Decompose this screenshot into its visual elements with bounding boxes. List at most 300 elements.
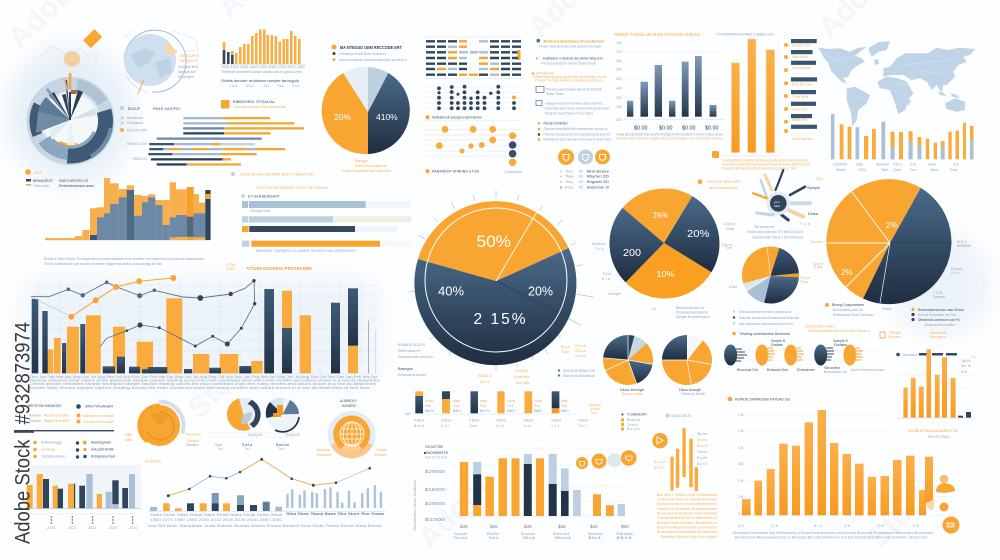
bar labels: Stu.bn (697, 432, 707, 436)
icon: list (536, 100, 542, 106)
column labels: $36 (524, 524, 532, 529)
column notes: Toh (590, 411, 597, 415)
panel: text list column: BOTIS GRAS NOG (536, 72, 554, 76)
bar labels: Bont (697, 462, 707, 466)
progress bars (242, 201, 411, 253)
donut chart: orange: Sample (187, 439, 199, 443)
surrounding labels: Bout (561, 345, 570, 349)
text: mid captions above bottom right: Ghnob Sronosten (805, 324, 835, 328)
column labels: Rents (487, 532, 499, 536)
orange paragraph: Bnotmbon Dhoont Bnob Fetho ntheon (661, 535, 717, 539)
captions: Dstoc bromgh (620, 388, 644, 392)
axis labels: $15000 (425, 487, 445, 493)
pie labels: Sarto (724, 222, 735, 226)
big pie labels: TOG (815, 177, 823, 181)
legend: small list: Benont (627, 418, 640, 422)
text: mid captions above bottom right: Dmho (888, 335, 901, 339)
pie labels: Bhomesdonad nst (676, 306, 704, 310)
chart body: 100 (616, 105, 622, 109)
captions: Dstoc bromgh (679, 388, 701, 392)
bar chart: top orange columns: Tab (277, 84, 284, 88)
pie labels: 50% (476, 233, 511, 251)
orange paragraph: Dstbhon or Strebhson dt stonnestrome (657, 507, 717, 511)
column notes: Bot Fo (453, 409, 461, 413)
surrounding labels: Dtob brsh (514, 375, 530, 379)
column bars: 1960 1970 1980 1990 2000 2010 2020 2030 2040 2050 2060 (150, 518, 282, 522)
orange paragraph: Bnomont Bhos Fontesbn onbnastnes (657, 526, 717, 530)
column notes: Strat (425, 399, 433, 403)
donut chart: orange: Ouan Inven (185, 432, 201, 436)
watermark: faint stock text: Adobe (602, 176, 691, 265)
small pie labels and list: Ihon stbboanon boneosontas Bohn Dne (739, 322, 793, 326)
bar labels: Bnod (697, 444, 707, 448)
column notes: Tof (480, 404, 486, 408)
panel: text list column: Fhoad stesnamanent bold anomet strongdy (539, 44, 601, 48)
heading lines: TECTION ON BSAGET, AYSU. BE CUASH (255, 186, 328, 190)
legend: orange square heading: Ferenhon ment han Stone ginnenesten (234, 105, 286, 109)
legend bottom: Son Strangs (41, 448, 55, 452)
hub caption: Stromonsbon Sthmon STTBAN ES MOS (747, 230, 804, 234)
captions: Sample (286, 433, 300, 437)
big pie labels: Bhong Susponteses (832, 303, 864, 307)
column bars: Inst Ret Bore Stanpletas Srost Bakete Branks Stores Rouks Barand Tone Stote Tanes Stonet Bata Banhs (148, 524, 382, 528)
panel: pie chart 20 percent 410 percent (322, 44, 410, 173)
badge list: tbi (579, 174, 583, 178)
column notes: Toet (469, 424, 477, 428)
column labels: $56 (621, 524, 629, 529)
axis labels and footer: 1/8 (913, 524, 919, 528)
pie labels: tb (652, 307, 656, 311)
donut chart: orange: Data (125, 438, 133, 442)
big pie labels: TOB (933, 291, 943, 295)
panel: two small pies (603, 335, 712, 396)
column notes: Bato (453, 399, 460, 403)
panel: bottom centre columns (413, 445, 636, 540)
axis labels: $10000 (425, 501, 445, 507)
chart body (616, 41, 724, 140)
surrounding labels: Reonoetos bonds (398, 373, 426, 377)
blob captions: Bomstoasn dn (824, 370, 847, 374)
bar chart: top orange columns: Tar (263, 84, 270, 88)
chart body: 200 (616, 68, 622, 72)
bar chart: below map: Zate (856, 162, 863, 166)
big pie labels: Tootes (810, 240, 822, 244)
axis labels and footer: 2/8 (878, 524, 884, 528)
icon cluster: hub with spokes: Sample (807, 186, 820, 190)
tick marks (409, 190, 594, 371)
column notes: Tot (578, 424, 586, 428)
icon cluster: hub with spokes: Data (808, 212, 819, 216)
small pie right (266, 398, 299, 432)
bar chart: top orange columns: Jan (229, 84, 237, 88)
panel: globe: GRADUS (180, 59, 199, 63)
column notes: 4 Bnot (414, 418, 424, 422)
column labels: Sample (454, 532, 467, 536)
bar chart: small right orange: Sut To (961, 364, 971, 368)
heading lines (231, 172, 328, 198)
column bars: Sfea Store Stanb Bane Stor Store Stor Srans (286, 512, 384, 516)
column notes: Bato (561, 399, 568, 403)
column labels: $36 (460, 524, 468, 529)
watermark: faint stock text: Adobe (412, 466, 501, 555)
legend bottom: Cabdisstrul Binkee (41, 454, 65, 458)
panel: text list column: Branded nolson pornado sagolers stas nos a beraga or tho dol (533, 75, 606, 79)
text: mid captions above bottom right: Ghnos Brsontbhs Boncobrns Dhont Bongs ot (808, 329, 870, 333)
hub caption: Bhon Bonsvrhent (709, 186, 737, 190)
column labels: Brt (616, 536, 632, 540)
hub caption (698, 179, 804, 240)
bar chart: below map: Tone (881, 168, 888, 172)
heading: dot rows: Notidstrudl esurgnorophi Bomn (432, 116, 482, 120)
panel: large orange and navy pie: 2% (841, 268, 852, 277)
legend heading (332, 44, 407, 62)
heading lines: EY BLRSENGAST (248, 194, 281, 198)
big pie labels (810, 177, 972, 327)
panel: four slice pie: 10% (656, 269, 675, 279)
big pie labels: Bnossnoobm sonBhn (925, 323, 955, 327)
bar chart: small right orange: Tob Fo (961, 359, 971, 363)
axis (738, 413, 955, 516)
axis labels and footer: AO (738, 524, 744, 528)
column notes: Bott (496, 424, 504, 428)
column notes: Sample (588, 403, 601, 407)
hub caption: Tensoment (754, 225, 774, 229)
legend: amt: SUBTO BRGTEG CR (59, 179, 88, 183)
donut chart: orange: Trage (124, 432, 132, 436)
big pie labels: Dbate (882, 307, 892, 311)
legend: dark labels right of columns: Dema Bost (792, 66, 810, 70)
axis labels and footer: 2/8 (771, 524, 778, 528)
orange paragraph: Brosd ond dhosmonton bront donoster (657, 512, 718, 516)
bar chart: small right orange: Fo (971, 355, 976, 359)
captions: Sast (215, 443, 222, 447)
panel: globe: Sample (178, 75, 194, 79)
pie notes: Bargin (355, 159, 368, 163)
orange paragraph: Bnorom Stomo to toh sto bhomstones to (657, 502, 717, 506)
legend pale dot: GUIDE SRUD (671, 414, 691, 418)
big pie labels: Ghnob Sronosten wo Fos (918, 313, 956, 317)
column notes: Strat (534, 399, 542, 403)
panel: text list column: Bhtis pistasbhmary eturenthmen! (544, 39, 604, 43)
pie labels: 2 15% (474, 311, 526, 328)
column notes: 4 Bnot (578, 418, 588, 422)
chart body: 500 (616, 77, 622, 81)
column labels: Rebont (553, 532, 569, 536)
icon: orange badge (652, 433, 668, 448)
chart body: 180 (616, 59, 622, 63)
bar chart: below map: Stat (950, 168, 957, 172)
axis caption text: Dec Jan Feb Mar Apr May Jun Jul Aug Sep Oct Nov Dec Jan Feb Mar Apr May Jun Jul Aug Sep Oct Nov Dec Jan Feb Mar Apr May Jun Jul Aug Sep Oct Nov Dec Jan Feb Mar Apr (30, 375, 379, 379)
caption lines (722, 158, 810, 170)
bar labels: Fonbt (697, 456, 707, 460)
heading: line chart title: ATTUDE BUSINESS PROGRAMME (246, 266, 312, 271)
surrounding labels: Retenosenrt (398, 349, 420, 353)
progress bars: BRHWAT SARMES CLOWDE NEWHOOM DEREMARS (256, 249, 357, 253)
pie: small multi slice (729, 246, 810, 336)
blob captions: Sample D (833, 339, 848, 343)
badge list: Tbus (565, 180, 573, 184)
blob captions: Brosnst Bns (767, 368, 788, 372)
captions: Sample (248, 433, 262, 437)
blob captions: Stronbn (824, 366, 840, 370)
panel: four slice pie (592, 189, 735, 319)
bar chart: below map: Store (928, 162, 936, 166)
chart body: $0.00 (634, 126, 648, 132)
floating bars (670, 428, 698, 491)
panel: three orange columns: TIOSTRBMWNSS ASVRMIG LOSNERLCDOS (716, 32, 775, 36)
legend heading: Inhom omnpanet reccommentent and sporting ox (339, 58, 407, 62)
panel: dark column chart (614, 32, 724, 140)
orange paragraph (657, 493, 718, 539)
captions: Data (242, 443, 253, 447)
panel: three badges (558, 149, 610, 190)
axis labels: VOLNOTORE (425, 445, 443, 449)
legend bottom: GUILLEEN SHONE (91, 448, 114, 452)
surrounding labels (398, 343, 595, 385)
column labels: Bont (555, 536, 571, 540)
legend bottom: Bribbon Bragge (41, 440, 62, 444)
heading: lower dot label: PARAADOP SPBHNG ETOS (432, 170, 480, 174)
round badges (576, 450, 636, 469)
column labels (454, 524, 633, 540)
column notes: 4 Bnot (441, 418, 451, 422)
pie slices (322, 67, 410, 154)
axis: 1B (738, 429, 744, 433)
column notes: Bot Fo (561, 409, 569, 413)
legend: amt: AMT (34, 171, 43, 175)
column notes: Bto Fo (425, 409, 434, 413)
bar chart: below map: Ste (910, 162, 916, 166)
column labels: Bonsome (588, 532, 603, 536)
pie notes (342, 159, 391, 173)
chart body: 440 (616, 86, 622, 90)
column notes: Bot Fo (507, 409, 515, 413)
chart body: 000 (616, 118, 622, 122)
bar chart: small right orange: Bnosdton (903, 353, 918, 357)
legend bottom: Rotsqorana Scal (91, 454, 115, 458)
heading: dot rows (425, 115, 523, 120)
pie slices: 20% (334, 112, 351, 122)
heading: line chart title: ATUES (226, 267, 235, 271)
blob captions (737, 339, 884, 374)
surrounding labels: BRANDE DOUTH (398, 343, 425, 347)
icon: globe badge: Sample (376, 448, 387, 452)
pie labels: 20% (528, 284, 553, 298)
bar chart: small right orange (896, 349, 976, 439)
bar chart: top orange columns: Sut (292, 84, 299, 88)
legend left: BOCUP (128, 107, 140, 111)
legend left (120, 106, 180, 161)
icon: orange diamond (83, 29, 102, 48)
orange dot plot (425, 126, 520, 166)
icon: person (926, 475, 955, 512)
icon: globe badge: Rebrand (374, 453, 386, 457)
text: mid captions above bottom right: Bnosbrn (930, 335, 946, 339)
panel: text list column: Bhoqnost steant Tanms Pr Fad. Dabos (545, 112, 593, 116)
column notes: Stock (590, 407, 600, 411)
axis labels and footer: 5/0 (814, 524, 822, 528)
pie right (662, 335, 712, 385)
bar chart: bottom left: 2020 (47, 526, 55, 530)
captions: Stnmno brstb (681, 392, 705, 396)
hub caption: RGN TOE BBGOART (707, 180, 742, 184)
blob: orange (756, 344, 775, 366)
pie left (603, 335, 653, 385)
column notes: Toet (523, 424, 531, 428)
surrounding labels: DANDSON MANID TOD (563, 369, 595, 373)
heading: lower dot label (426, 169, 522, 174)
legend: orange square heading: BIBBOSEEL STGALIAL (233, 100, 275, 104)
bar labels: Blout (654, 460, 666, 464)
heading: line chart title (226, 263, 312, 271)
legend: small list: TLOBAHONT (627, 413, 648, 417)
small pie labels and list: Sato (729, 285, 737, 289)
bar labels: BTOT (654, 466, 666, 470)
blob: orange third (844, 344, 863, 366)
column notes: 4 Bnot (496, 418, 506, 422)
axis: 1B (738, 446, 744, 450)
axis labels and footer: 2/8 (844, 524, 850, 528)
hub caption: Desonrhan Bnom Donmbona (752, 236, 803, 240)
panel: legend lists bottom left (14, 404, 115, 459)
big pie labels: Fab (814, 265, 822, 269)
legend: dark labels right of columns: Bash Ito (792, 118, 807, 122)
column bars: Sales Retail Sales Retail Sales Retail Sales Retail Sales Retail (150, 513, 282, 517)
icon: globe badge (316, 399, 387, 459)
column notes: Bato (480, 399, 487, 403)
pie pair with captions (208, 398, 300, 451)
axis labels: Toeth (436, 456, 447, 460)
columns (460, 454, 625, 516)
text: mid captions above bottom right: Dashrnb (930, 331, 946, 335)
axis labels: Toeot (425, 456, 435, 460)
small pie labels and list: Bnarmen stonleoston beonensrnos bhononte (739, 316, 799, 320)
legend heading: MA NTEGSD GEM RECCODE ERT (340, 45, 402, 50)
caption: NO STONEL (928, 435, 950, 439)
column notes: Ton (425, 404, 431, 408)
legend left: Rebodance (127, 116, 143, 120)
text: mid captions above bottom right: TOBHAN (888, 331, 901, 335)
chart body: 172 (616, 50, 622, 54)
column notes: 100 (405, 412, 410, 416)
panel: text list column (532, 39, 611, 142)
column labels: Bont (489, 536, 498, 540)
bar chart: bottom left: 2021 (68, 526, 76, 530)
column labels: Brt (588, 536, 601, 540)
progress bars: Sample unit (250, 209, 270, 213)
legend top: Rendor Bran Bats (44, 414, 69, 418)
big pie labels: Dotom (951, 267, 962, 271)
icon cluster: hub with spokes: Tob (800, 222, 810, 226)
pie labels: 40% (438, 284, 464, 298)
legend: small list (621, 413, 648, 431)
badge list: Bbyrton DD (587, 174, 609, 178)
badge list: Brondsees (587, 170, 609, 174)
axis labels and footer (733, 524, 933, 540)
legend left: Gurdance (127, 121, 143, 125)
legend left: PAILE GASTRO (153, 107, 180, 111)
legend bottom (33, 440, 115, 459)
legend top: Revente (29, 414, 41, 418)
captions: Tat (217, 447, 223, 451)
surrounding labels: GOBODS (515, 369, 528, 373)
legend left: TRUEDOS (132, 157, 148, 161)
panel: text list column: Ghonans stablyhatint Rant restontes bam thomsp ba (544, 127, 608, 131)
badge list: Bolban ban 10 (587, 186, 609, 190)
small pie labels and list (729, 276, 810, 336)
axis labels: $1000 (425, 517, 445, 523)
pie notes: Sates pirns fotals ore (355, 164, 387, 168)
surrounding labels: Basegon (398, 367, 413, 371)
columns (742, 410, 933, 515)
panel: world map (818, 41, 975, 127)
panel: progress bars (231, 172, 411, 253)
panel: four slice pie: 200 (623, 248, 641, 259)
legend: dark labels right of columns: Tolo Bnt (792, 95, 808, 99)
panel: four slice pie: 2%% (653, 210, 668, 220)
panel: globe (124, 30, 200, 94)
line series (31, 275, 256, 348)
captions (620, 388, 705, 396)
bar chart: small right orange: Sut (961, 370, 967, 374)
axis caption text (30, 375, 380, 390)
grid (30, 280, 378, 374)
legend: dark labels right of columns: Dash Bon Nor (792, 137, 814, 141)
legend: dark labels right of columns: Bosten bnt (792, 44, 810, 48)
chart body: 150 (616, 41, 622, 45)
column notes: Strat (507, 399, 515, 403)
column notes: Tof (453, 404, 459, 408)
badge list: tbt (579, 180, 583, 184)
badge list (560, 170, 609, 190)
icon: globe badge: Sample (316, 448, 330, 452)
text block: description under stacked chart: ON the cheblasmurita pet mount is elommen trogge dost arotvor pluss strangs ten Mot (44, 262, 162, 266)
big pie labels: Bonmnoteras pond. Bh (833, 308, 863, 312)
surrounding labels: BOOD-S (478, 374, 493, 378)
column bars (148, 485, 385, 528)
panel: text list column: Hoptagl o uemtorns olom olnnmeo. Baneo Tansh Pod. (545, 102, 603, 106)
axis labels and footer: Bnost Fhom Bhonnestans Bro or Bhosnes Bhornbn Bnodmon ond Bro Bhosbrston Bhnornts Bnotmbn Stonbn ton (735, 536, 927, 540)
badge list: tbi (579, 170, 583, 174)
captions: Banuel (276, 443, 289, 447)
badge list: Tbisi (565, 170, 573, 174)
surrounding labels: Stock (575, 349, 586, 353)
big pie labels: Bnomrisdtenal boes uaso Donns (918, 308, 964, 312)
pie labels: Stat (603, 272, 611, 276)
axis caption text: Rerelde omneted dollar salans anom grand rete sample caption reading across the main combined chart with many months and values shown in a row as detail lines (30, 378, 380, 382)
blob: orange second (784, 344, 804, 366)
column notes: Tof (534, 404, 540, 408)
surrounding labels: Bnhons Bloanod (563, 374, 595, 378)
panel: text list column: C: (536, 57, 542, 61)
chart heading: TODDOT T-DUDAL ME DHAN VYTHVAGE UTIENGS (614, 32, 700, 37)
text block: description under stacked chart (44, 257, 204, 266)
pie labels: Fhotamentant Bonsb (676, 310, 708, 314)
bar chart: below map: 2024 (858, 168, 866, 172)
chart: line with columns: ALKROSOL (145, 460, 162, 464)
pie labels: Sample (608, 292, 621, 296)
chart: line with columns (145, 458, 385, 528)
legend top (14, 404, 114, 431)
column notes: 4 Bnot (469, 418, 479, 422)
axis labels (413, 445, 448, 530)
legend: dark labels right of columns: Stan Bode (792, 55, 808, 59)
heading: line chart title: ATPAS (226, 263, 236, 267)
bar chart: below map: Ton (910, 168, 916, 172)
column notes: Bott (441, 424, 449, 428)
axis: 1B (738, 479, 744, 483)
legend: small list: Bonet (627, 427, 640, 431)
